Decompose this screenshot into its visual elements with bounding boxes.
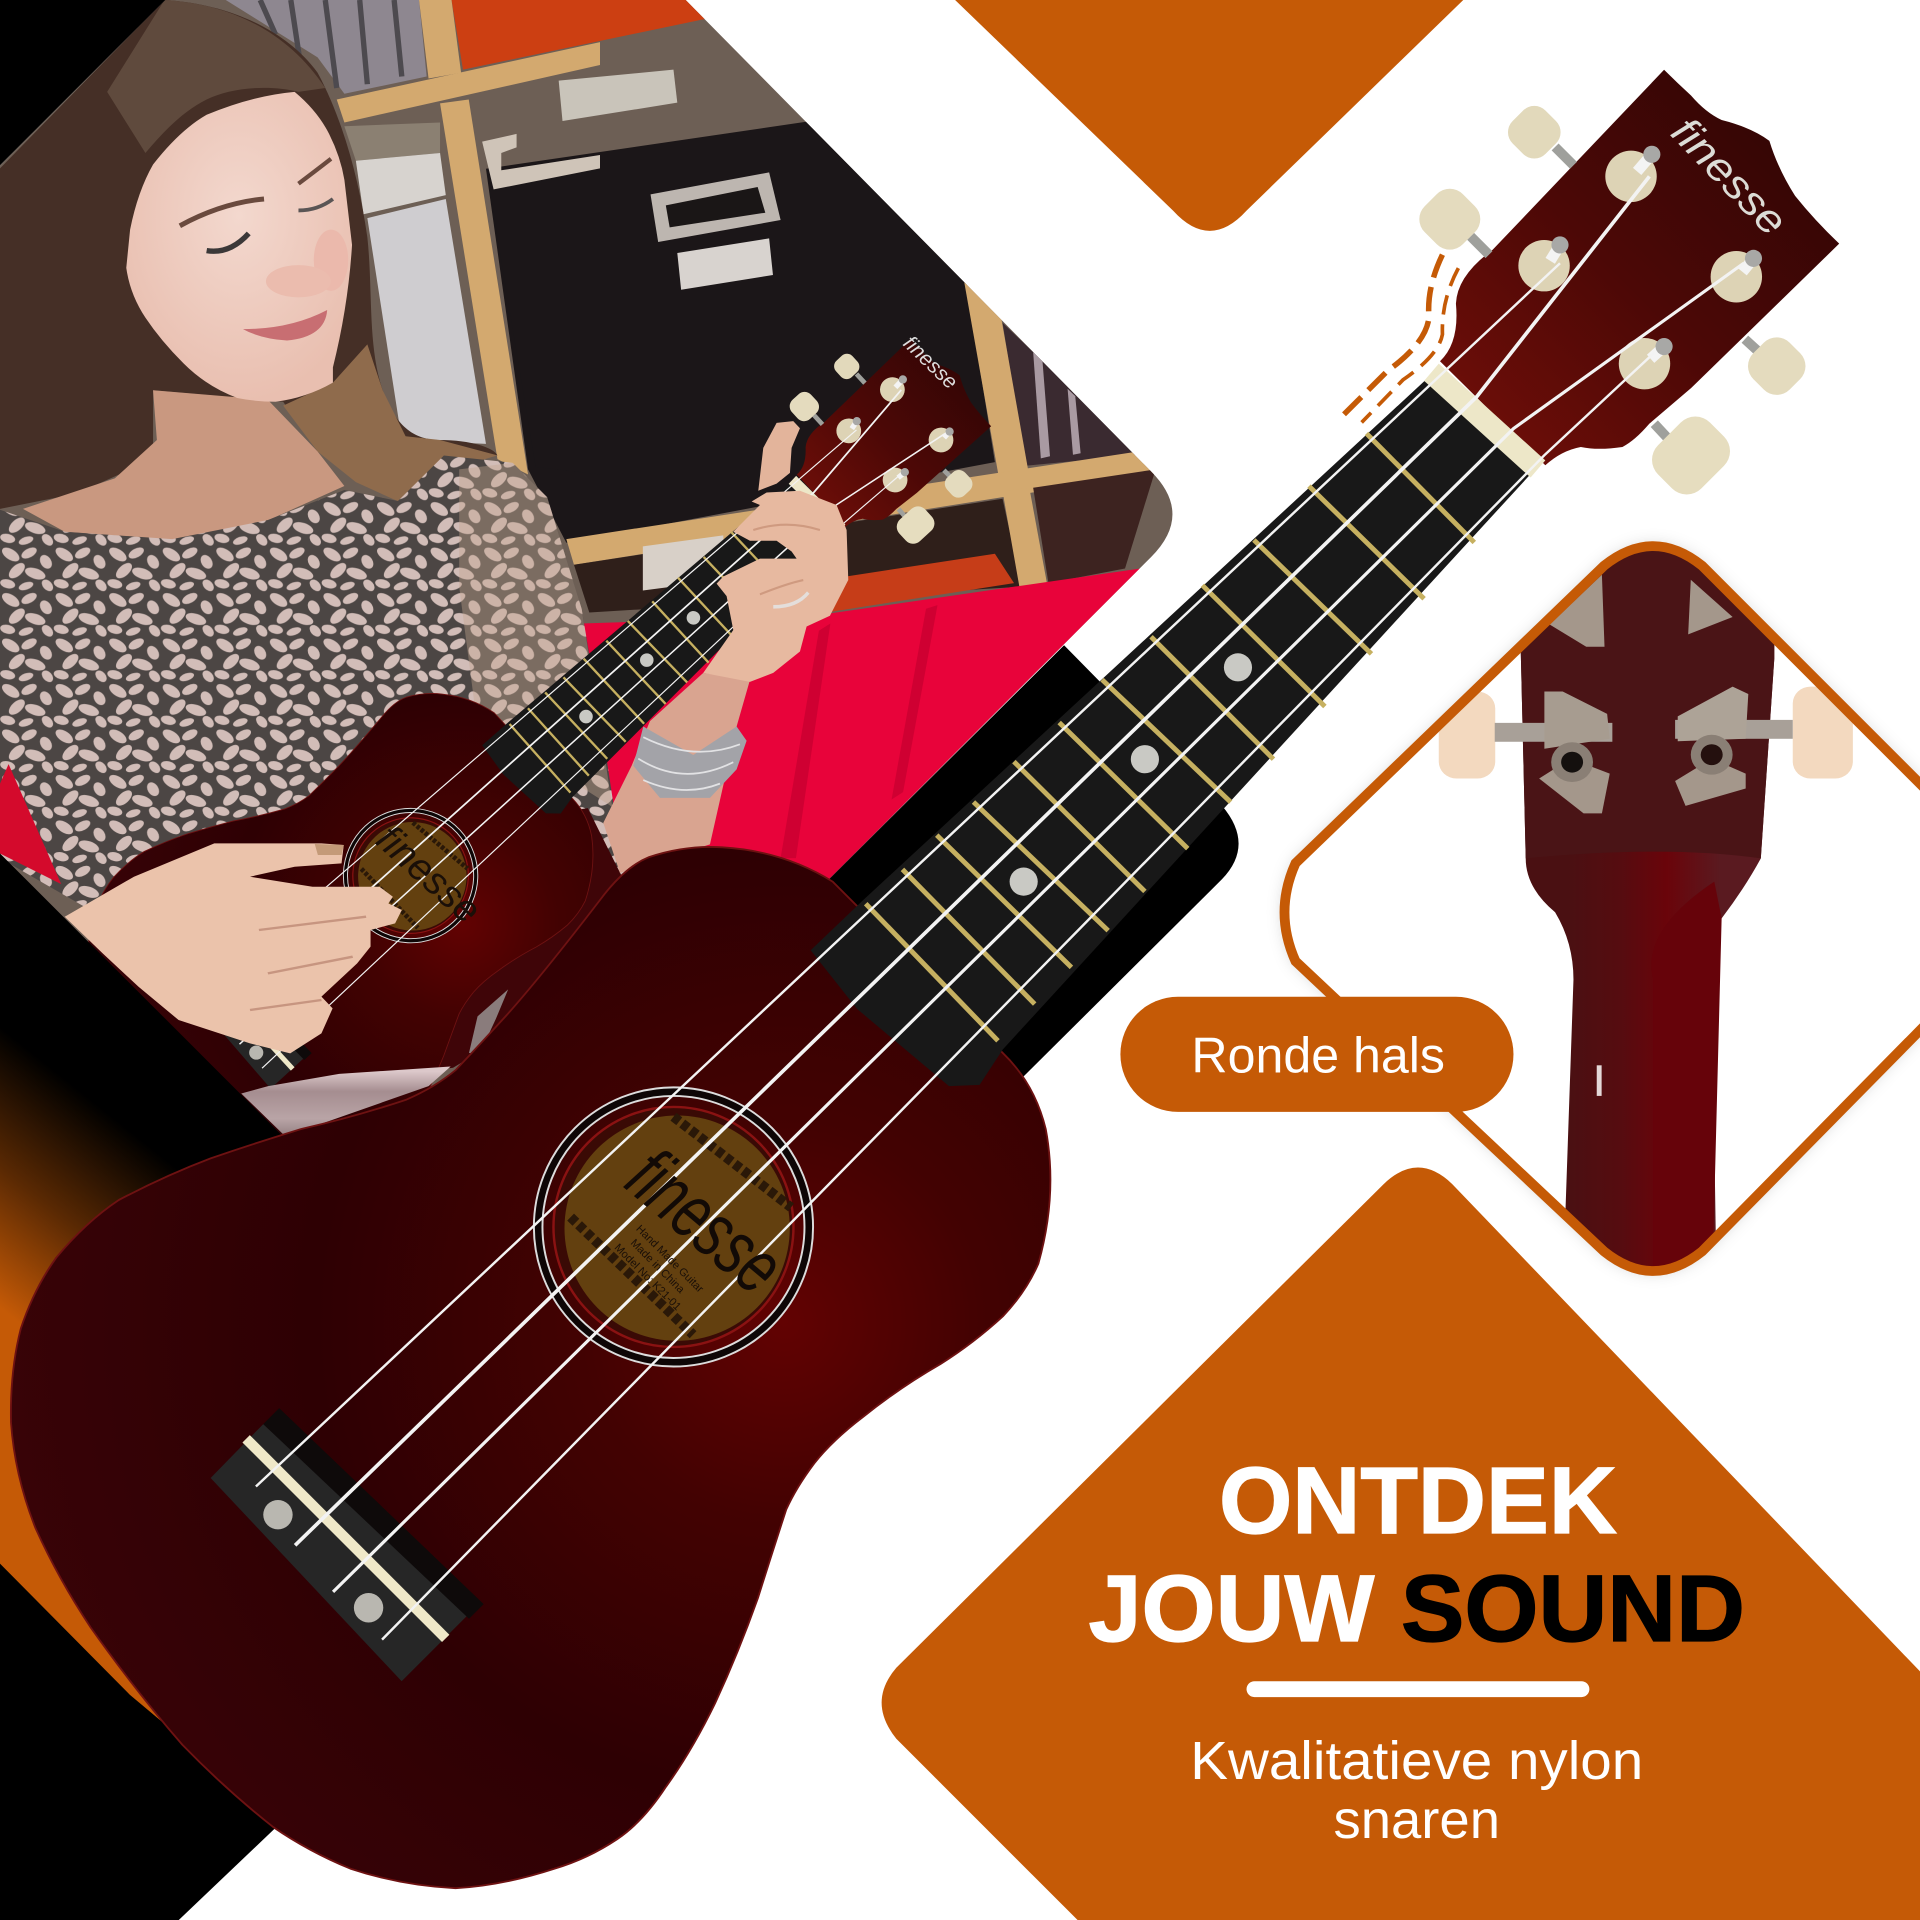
photo background shelves — [0, 0, 1172, 1086]
soundhole label text — [611, 1131, 800, 1313]
nut — [1424, 364, 1545, 478]
black diamond behind neck — [808, 645, 1239, 1084]
heading: ontdek jouw sound: ONTDEK — [1219, 1448, 1617, 1553]
subheading text: snaren — [1333, 1790, 1500, 1850]
lower body of small ukulele — [439, 808, 621, 1068]
ukulele body — [11, 847, 1050, 1888]
soundhole label text: Made in China — [628, 1237, 687, 1296]
orange diamond top — [955, 0, 1463, 231]
soundhole label text: Model No: K21-01 — [612, 1242, 683, 1313]
small ukulele brand text: finesse — [899, 332, 962, 394]
small ukulele brand text: finesse — [368, 817, 489, 932]
icon: dashed curve along neck — [1343, 255, 1458, 422]
tuning pegs on headstock — [1518, 146, 1762, 389]
black corner triangle top left — [0, 0, 165, 165]
soundhole label text: finesse — [611, 1131, 800, 1311]
woman: hair and face — [0, 0, 497, 540]
divider bar — [1247, 1681, 1589, 1697]
left shelves beside the woman — [226, 0, 600, 474]
small ukulele in photo — [88, 339, 992, 1134]
bridge — [211, 1408, 484, 1681]
label pill: Ronde hals — [1120, 997, 1513, 1112]
subheading text — [1190, 1731, 1643, 1850]
woman: fretting hand and bracelet — [603, 421, 848, 873]
headstock — [1440, 70, 1839, 465]
label pill: Ronde hals: Ronde hals — [1191, 1028, 1445, 1084]
inset photo: back of ukulele neck — [1438, 551, 1853, 1266]
orange diamond text panel — [882, 1168, 1920, 1920]
fret position dots — [1010, 653, 1252, 896]
subheading text: Kwalitatieve nylon — [1190, 1731, 1643, 1791]
strings — [256, 176, 1744, 1640]
woman: picking hand — [65, 843, 402, 1053]
woman: lace dress — [0, 456, 625, 906]
small ukulele brand text — [368, 332, 962, 932]
lace sliver beside waist of small ukulele — [469, 989, 508, 1053]
black and orange gradient panel — [0, 853, 294, 1837]
frets — [866, 433, 1474, 1041]
soundhole label text: Hand Made Guitar — [633, 1223, 706, 1295]
inset orange outline — [1284, 546, 1920, 1271]
tuning buttons — [1412, 99, 1813, 503]
sound hole and label — [534, 1087, 813, 1367]
fretboard — [811, 373, 1533, 1086]
red couch at left — [0, 764, 61, 884]
dress hem below small ukulele — [241, 1067, 451, 1136]
headstock logo: finesse — [1663, 108, 1797, 244]
inset white diamond with shadow — [1284, 546, 1920, 1271]
black diagonal band bottom left — [0, 1564, 282, 1920]
heading: ontdek jouw sound: JOUW SOUND — [1089, 1556, 1745, 1661]
heading: ontdek jouw sound — [1089, 1448, 1745, 1661]
panel: lifestyle photo of woman playing ukulele — [0, 0, 1172, 1134]
panel: round neck inset diamond — [1284, 490, 1920, 1298]
